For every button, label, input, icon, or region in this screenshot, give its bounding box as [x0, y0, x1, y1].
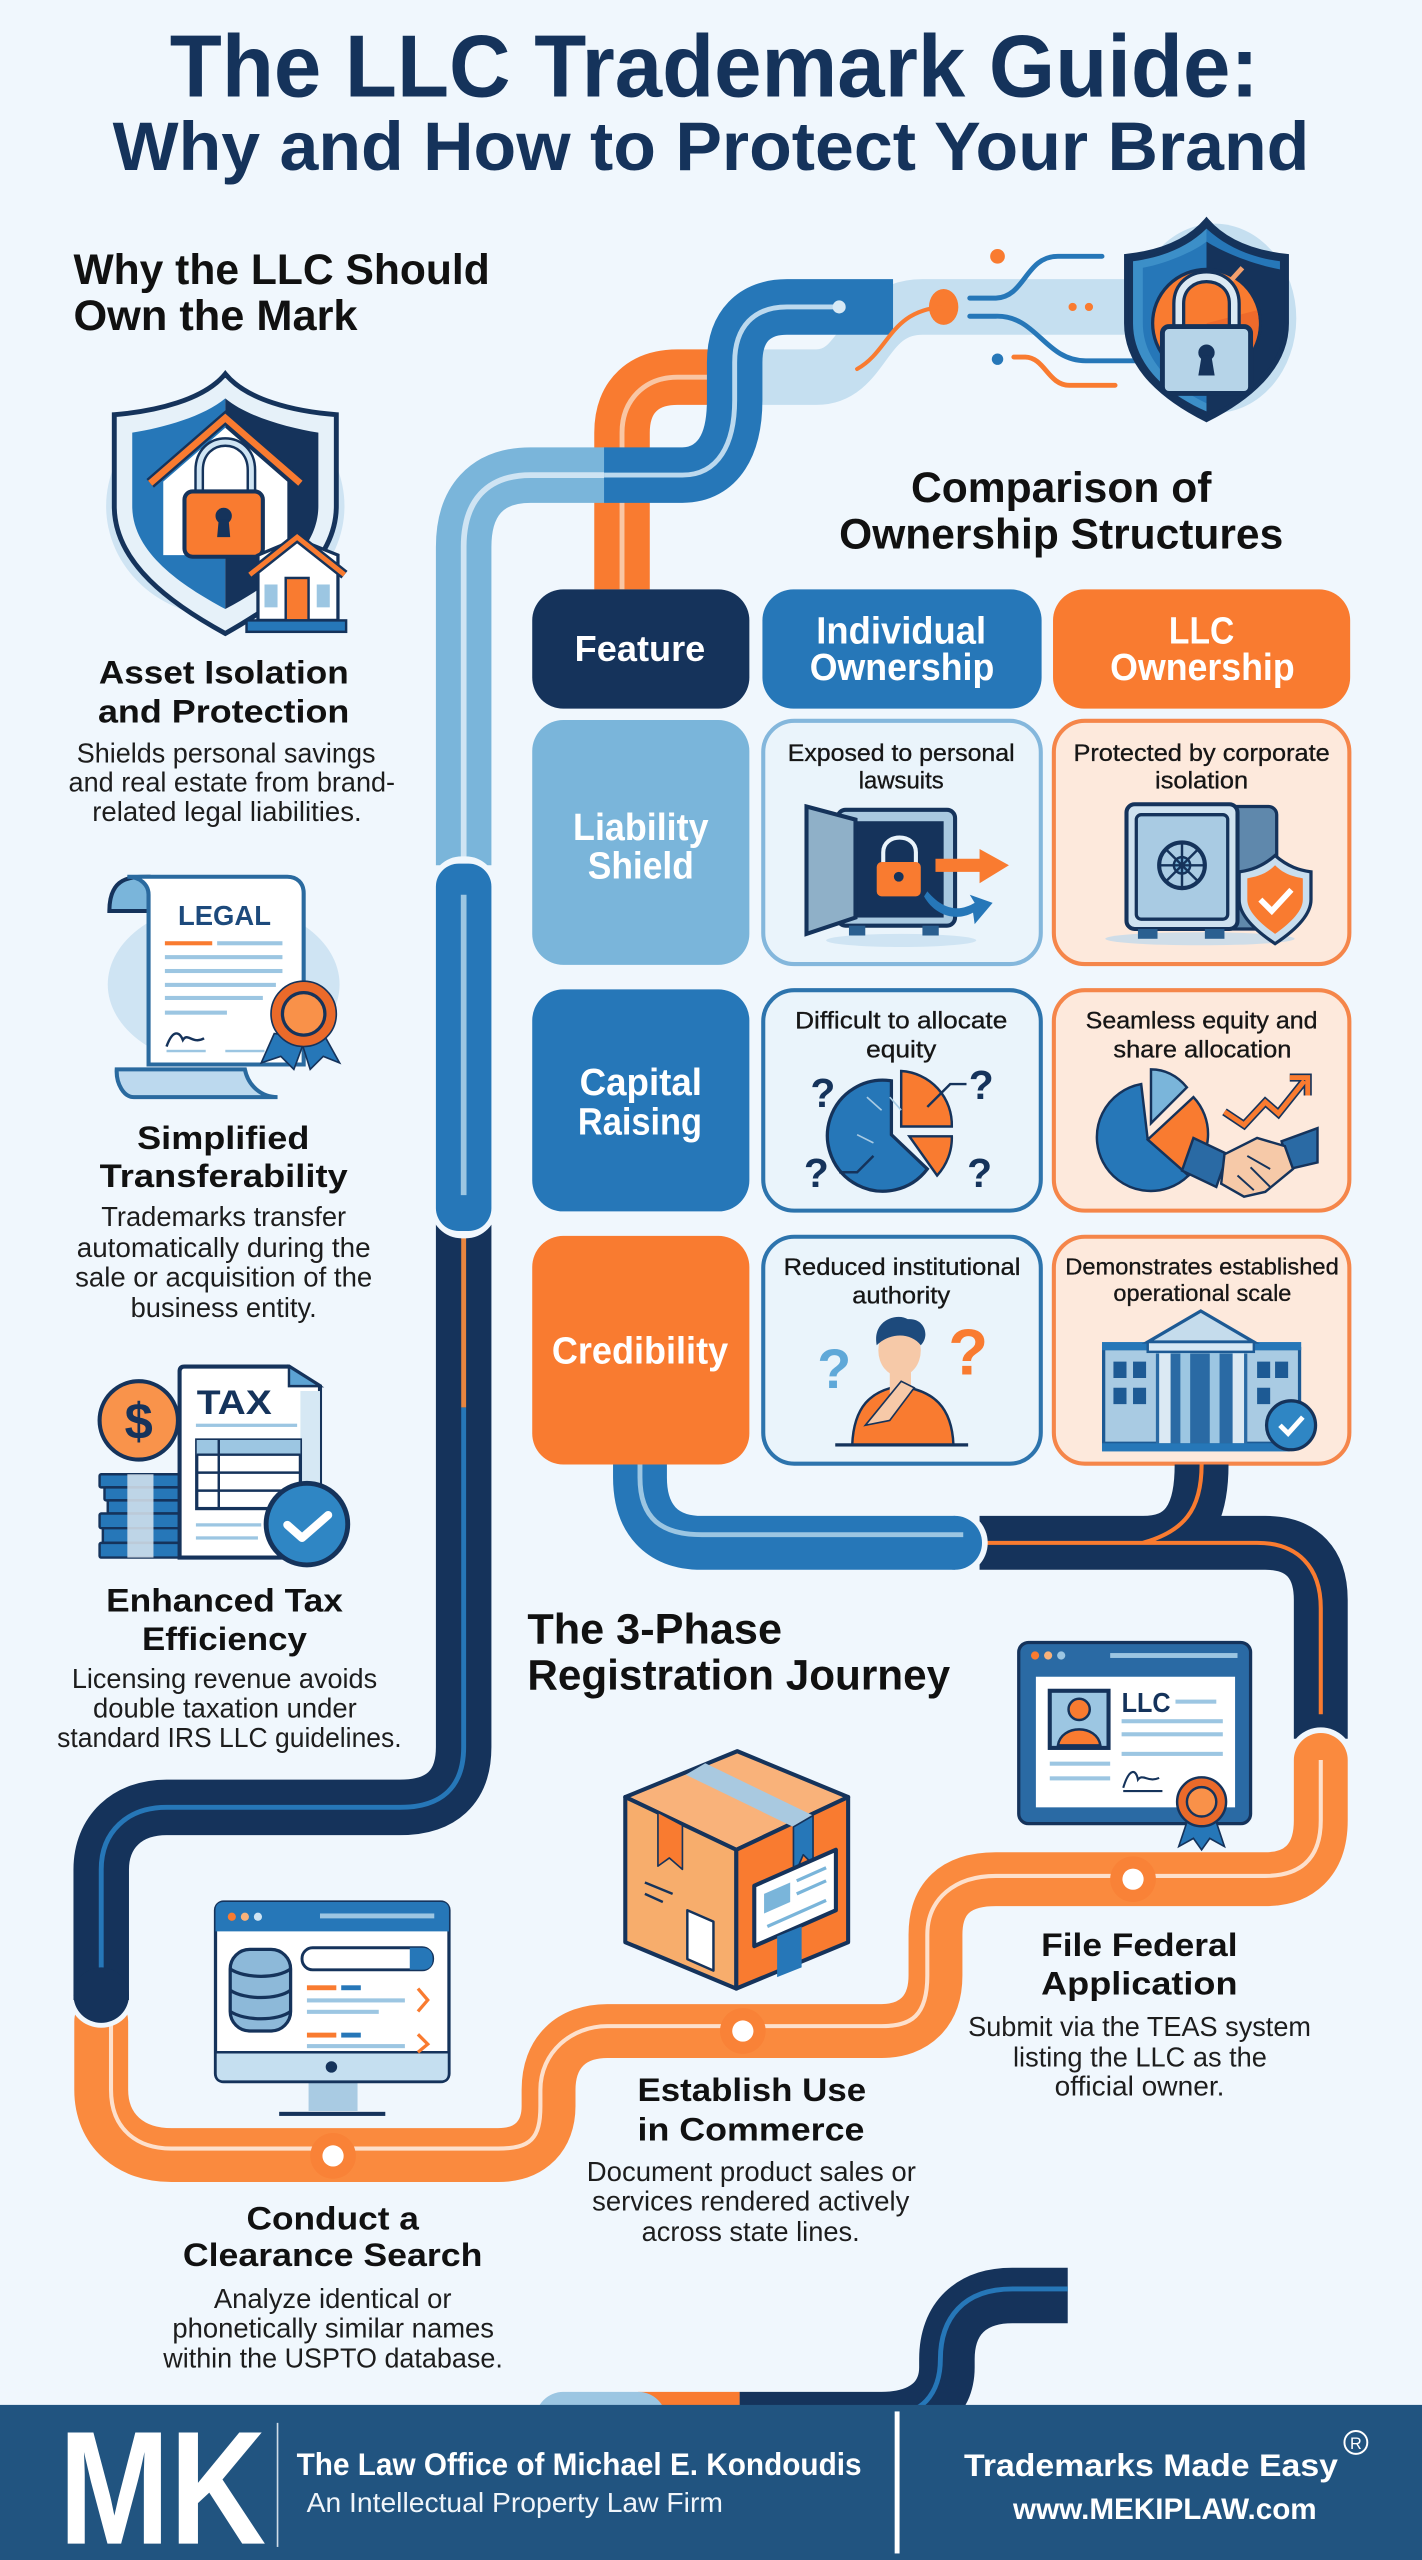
- row: credibility: Credibility: [552, 1329, 728, 1371]
- text block: file federal application: Application: [1041, 1964, 1238, 2001]
- text block: conduct a clearance search: Analyze identical or: [214, 2283, 452, 2314]
- icon: open safe: [807, 807, 1009, 947]
- heading: 3-phase journey: The 3-Phase: [527, 1606, 782, 1653]
- step marker: establish use: [720, 2008, 766, 2054]
- row: credibility: authority: [852, 1284, 950, 1310]
- tagline and website: www.MEKIPLAW.com: [1012, 2493, 1317, 2526]
- journey path: table to registration connector: [640, 1464, 1321, 1739]
- step marker: file federal: [1110, 1856, 1156, 1902]
- text block: enhanced tax efficiency: [57, 1581, 402, 1753]
- heading: why the LLC: Own the Mark: [73, 292, 358, 339]
- row: credibility: operational scale: [1113, 1280, 1291, 1306]
- title: Why and How to Protect Your Brand: [113, 108, 1309, 185]
- heading: comparison: [839, 464, 1283, 558]
- text block: simplified transferability: sale or acquisition of the: [75, 1262, 372, 1293]
- row: liability shield: Liability: [573, 806, 709, 848]
- text block: simplified transferability: Trademarks transfer: [101, 1201, 346, 1232]
- icon: LLC certificate: LLC: [1122, 1687, 1171, 1718]
- text block: establish use in commerce: Establish Use: [638, 2071, 866, 2108]
- row: capital raising: Capital: [580, 1061, 702, 1103]
- row: liability shield: Shield: [588, 844, 694, 886]
- icon: broken pie chart: ?: [967, 1150, 992, 1196]
- row: capital raising: Raising: [578, 1101, 702, 1143]
- row: credibility: Reduced institutional: [784, 1255, 1020, 1281]
- text block: establish use in commerce: Document product sales or: [587, 2156, 916, 2187]
- table header row: Ownership: [1110, 646, 1295, 688]
- heading: comparison: Ownership Structures: [839, 511, 1283, 558]
- icon: pie chart and handshake: [1097, 1069, 1318, 1197]
- text block: establish use in commerce: in Commerce: [638, 2110, 864, 2147]
- footer bar: [0, 2399, 1422, 2560]
- text block: simplified transferability: business entity.: [131, 1292, 317, 1323]
- text block: simplified transferability: [75, 1119, 372, 1323]
- text block: asset isolation: and Protection: [98, 692, 349, 729]
- icon: shield with house and lock: [106, 374, 346, 633]
- icon: broken pie chart: [804, 1062, 994, 1196]
- heading: why the LLC: Why the LLC Should: [73, 246, 490, 293]
- row: credibility: [532, 1236, 1349, 1464]
- icon: closed safe with shield: [1105, 804, 1311, 945]
- text block: asset isolation: related legal liabilities.: [92, 796, 362, 827]
- icon: thinking person: [817, 1316, 988, 1447]
- text block: file federal application: File Federal: [1041, 1926, 1238, 1963]
- text block: establish use in commerce: across state lines.: [642, 2216, 860, 2247]
- tagline and website: Trademarks Made Easy: [964, 2448, 1339, 2483]
- title: [113, 16, 1309, 185]
- firm name: [297, 2447, 862, 2518]
- table header row: LLC: [1169, 609, 1234, 651]
- row: capital raising: Difficult to allocate: [795, 1009, 1007, 1035]
- row: liability shield: isolation: [1155, 769, 1248, 795]
- text block: conduct a clearance search: Conduct a: [247, 2199, 420, 2236]
- icon: shipping box: [625, 1751, 848, 1989]
- text block: file federal application: official owner.: [1055, 2071, 1224, 2102]
- text block: asset isolation: Shields personal savings: [77, 737, 375, 768]
- icon: legal document with seal: LEGAL: [178, 900, 271, 931]
- row: liability shield: Protected by corporate: [1073, 741, 1330, 767]
- text block: enhanced tax efficiency: standard IRS LLC guidelines.: [57, 1722, 402, 1753]
- text block: establish use in commerce: services rendered actively: [592, 2186, 909, 2217]
- row: liability shield: Exposed to personal: [788, 741, 1015, 767]
- table header row: Individual: [816, 609, 986, 651]
- text block: simplified transferability: Transferability: [100, 1157, 348, 1194]
- journey path: bottom fragment: [563, 2289, 1068, 2420]
- text block: conduct a clearance search: phonetically similar names: [172, 2312, 494, 2343]
- row: capital raising: share allocation: [1113, 1037, 1291, 1063]
- heading: comparison: Comparison of: [911, 464, 1212, 511]
- tagline and website: [964, 2431, 1367, 2526]
- table header row: Ownership: [810, 646, 994, 688]
- table header row: [532, 589, 1350, 709]
- text block: asset isolation: [69, 654, 395, 827]
- text block: file federal application: listing the LLC as the: [1013, 2041, 1267, 2072]
- step marker: clearance search: [310, 2133, 356, 2179]
- row: capital raising: Seamless equity and: [1086, 1009, 1318, 1035]
- heading: 3-phase journey: [527, 1606, 951, 1698]
- text block: enhanced tax efficiency: Licensing revenue avoids: [72, 1663, 377, 1694]
- text block: enhanced tax efficiency: Efficiency: [142, 1620, 307, 1657]
- icon: tax form with coin: [100, 1367, 348, 1565]
- text block: conduct a clearance search: within the USPTO database.: [162, 2342, 503, 2373]
- firm name: The Law Office of Michael E. Kondoudis: [297, 2447, 862, 2482]
- text block: file federal application: Submit via the TEAS system: [968, 2011, 1311, 2042]
- icon: legal document with seal: [108, 877, 340, 1097]
- title: The LLC Trademark Guide:: [170, 16, 1259, 115]
- journey path: top connectors: [464, 300, 1135, 865]
- journey path: left descending line: [69, 860, 493, 2028]
- row: capital raising: equity: [866, 1037, 936, 1063]
- icon: broken pie chart: ?: [969, 1062, 994, 1108]
- icon: tax form with coin: TAX: [197, 1384, 272, 1422]
- comparison table: [532, 589, 1350, 1464]
- icon: database monitor: [216, 1902, 449, 2116]
- text block: establish use in commerce: [587, 2071, 916, 2247]
- icon: broken pie chart: ?: [804, 1150, 829, 1196]
- text block: asset isolation: and real estate from brand-: [69, 767, 395, 798]
- text block: asset isolation: Asset Isolation: [99, 654, 349, 691]
- tagline and website: R: [1350, 2435, 1362, 2453]
- text block: conduct a clearance search: [162, 2199, 503, 2373]
- icon: institution building: [1102, 1311, 1316, 1451]
- firm name: An Intellectual Property Law Firm: [307, 2487, 723, 2518]
- text block: simplified transferability: Simplified: [137, 1119, 309, 1156]
- icon: LLC certificate: [1019, 1642, 1251, 1850]
- row: credibility: Demonstrates established: [1065, 1253, 1339, 1279]
- icon: top shield with lock: [1126, 220, 1296, 420]
- icon: tax form with coin: $: [125, 1392, 153, 1449]
- row: liability shield: [532, 720, 1349, 965]
- text block: enhanced tax efficiency: double taxation under: [93, 1693, 357, 1724]
- row: capital raising: [532, 989, 1349, 1211]
- icon: thinking person: ?: [948, 1316, 988, 1389]
- table header row: Feature: [575, 628, 705, 669]
- text block: conduct a clearance search: Clearance Search: [183, 2236, 482, 2273]
- row: liability shield: lawsuits: [859, 769, 944, 795]
- icon: broken pie chart: ?: [810, 1070, 835, 1116]
- text block: enhanced tax efficiency: Enhanced Tax: [106, 1581, 343, 1618]
- icon: connector circuit lines: [857, 249, 1153, 385]
- heading: 3-phase journey: Registration Journey: [527, 1651, 951, 1698]
- journey path: orange registration line: [101, 1727, 1353, 2179]
- icon: thinking person: ?: [817, 1338, 851, 1400]
- text block: file federal application: [968, 1926, 1311, 2102]
- text block: simplified transferability: automatically during the: [77, 1232, 371, 1263]
- heading: why the LLC: [73, 246, 490, 339]
